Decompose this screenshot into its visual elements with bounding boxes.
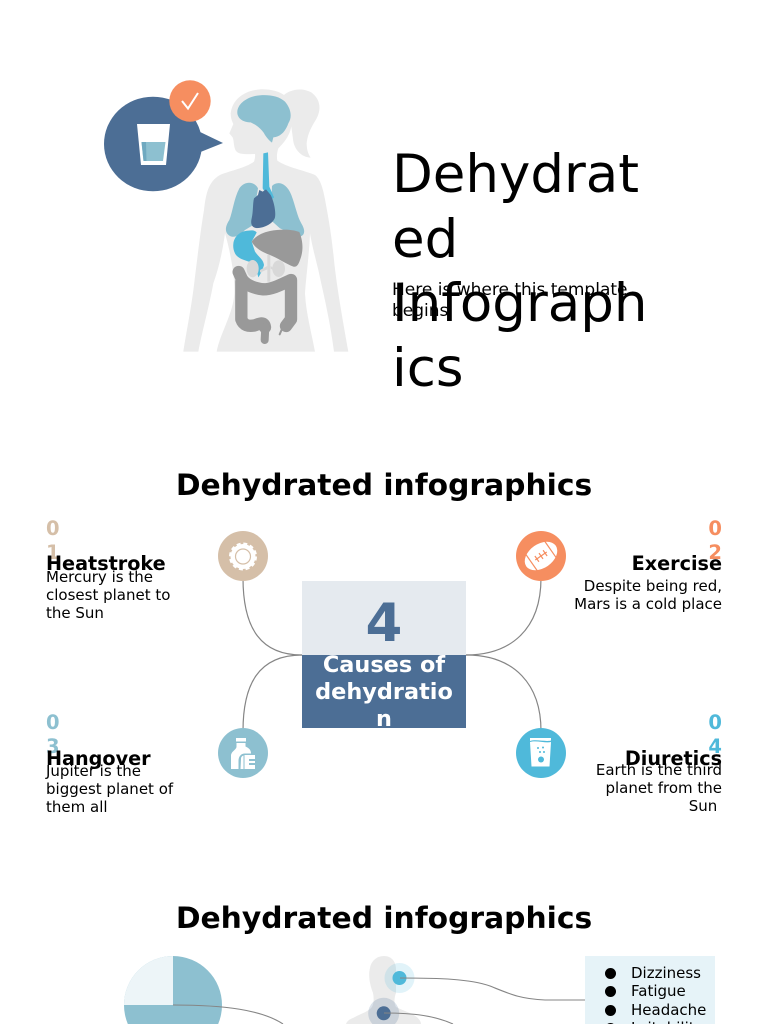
number 4 xyxy=(302,581,466,655)
bullet list: Headache xyxy=(631,1001,706,1019)
figure silhouette with markers xyxy=(346,956,421,1024)
hero illustration: body with organs xyxy=(184,89,348,352)
number 02 xyxy=(708,517,722,564)
cause 02: exercise xyxy=(574,517,722,613)
section heading: causes: Dehydrated infographics xyxy=(176,468,592,503)
name: Exercise xyxy=(632,552,722,575)
cause 01: heatstroke xyxy=(46,517,170,622)
description: Mercury is the closest planet to the Sun xyxy=(46,568,170,622)
liver xyxy=(252,230,302,267)
number 04: 0 xyxy=(708,711,722,734)
symptom connector lines xyxy=(173,978,585,1024)
marker: head xyxy=(384,963,414,993)
stomach xyxy=(233,230,264,277)
check badge xyxy=(169,80,211,122)
title: Dehydrat ed Infograph ics xyxy=(392,144,647,399)
brain xyxy=(237,95,291,143)
kidneys and spine xyxy=(247,255,285,282)
number 03 xyxy=(46,711,60,758)
bullet list: Dizziness xyxy=(631,964,701,982)
connector lines xyxy=(242,581,542,728)
cause 03: hangover xyxy=(45,711,174,816)
name: Heatstroke xyxy=(46,552,166,575)
heart xyxy=(251,189,275,228)
subtitle: Here is where this template begins xyxy=(392,280,628,321)
number 03: 3 xyxy=(46,735,60,758)
name: Diuretics xyxy=(625,747,722,770)
lungs xyxy=(226,183,304,237)
number 02: 2 xyxy=(708,541,722,564)
bullet list: Fatigue xyxy=(631,982,686,1000)
icon: hangover bottle xyxy=(218,728,268,778)
number 01 xyxy=(46,517,60,564)
number 02: 0 xyxy=(708,517,722,540)
intestines xyxy=(239,272,291,340)
icon: diuretics glass xyxy=(516,728,566,778)
name: Hangover xyxy=(46,747,151,770)
description: Despite being red, Mars is a cold place xyxy=(574,577,722,613)
center card: 4 causes of dehydration xyxy=(302,581,466,728)
marker: chest xyxy=(368,998,399,1024)
description: Jupiter is the biggest planet of them all xyxy=(46,762,173,816)
description: Earth is the third planet from the Sun xyxy=(596,761,722,815)
icon: exercise football xyxy=(516,531,566,581)
body silhouette xyxy=(183,89,348,352)
symptoms list panel xyxy=(585,956,715,1024)
speech bubble with glass of water xyxy=(104,96,223,192)
number 01: 0 xyxy=(46,517,60,540)
pie chart xyxy=(124,956,222,1024)
section heading: symptoms: Dehydrated infographics xyxy=(176,901,592,936)
number 04 xyxy=(708,711,722,758)
bullet list xyxy=(605,964,706,1024)
number 03: 0 xyxy=(46,711,60,734)
number 01: 1 xyxy=(46,541,60,564)
number 04: 4 xyxy=(708,735,722,758)
windpipe xyxy=(263,152,274,201)
cause 04: diuretics xyxy=(596,711,722,815)
icon: heatstroke gear xyxy=(218,531,268,581)
glass xyxy=(137,124,170,165)
number 4: 4 xyxy=(366,593,402,654)
